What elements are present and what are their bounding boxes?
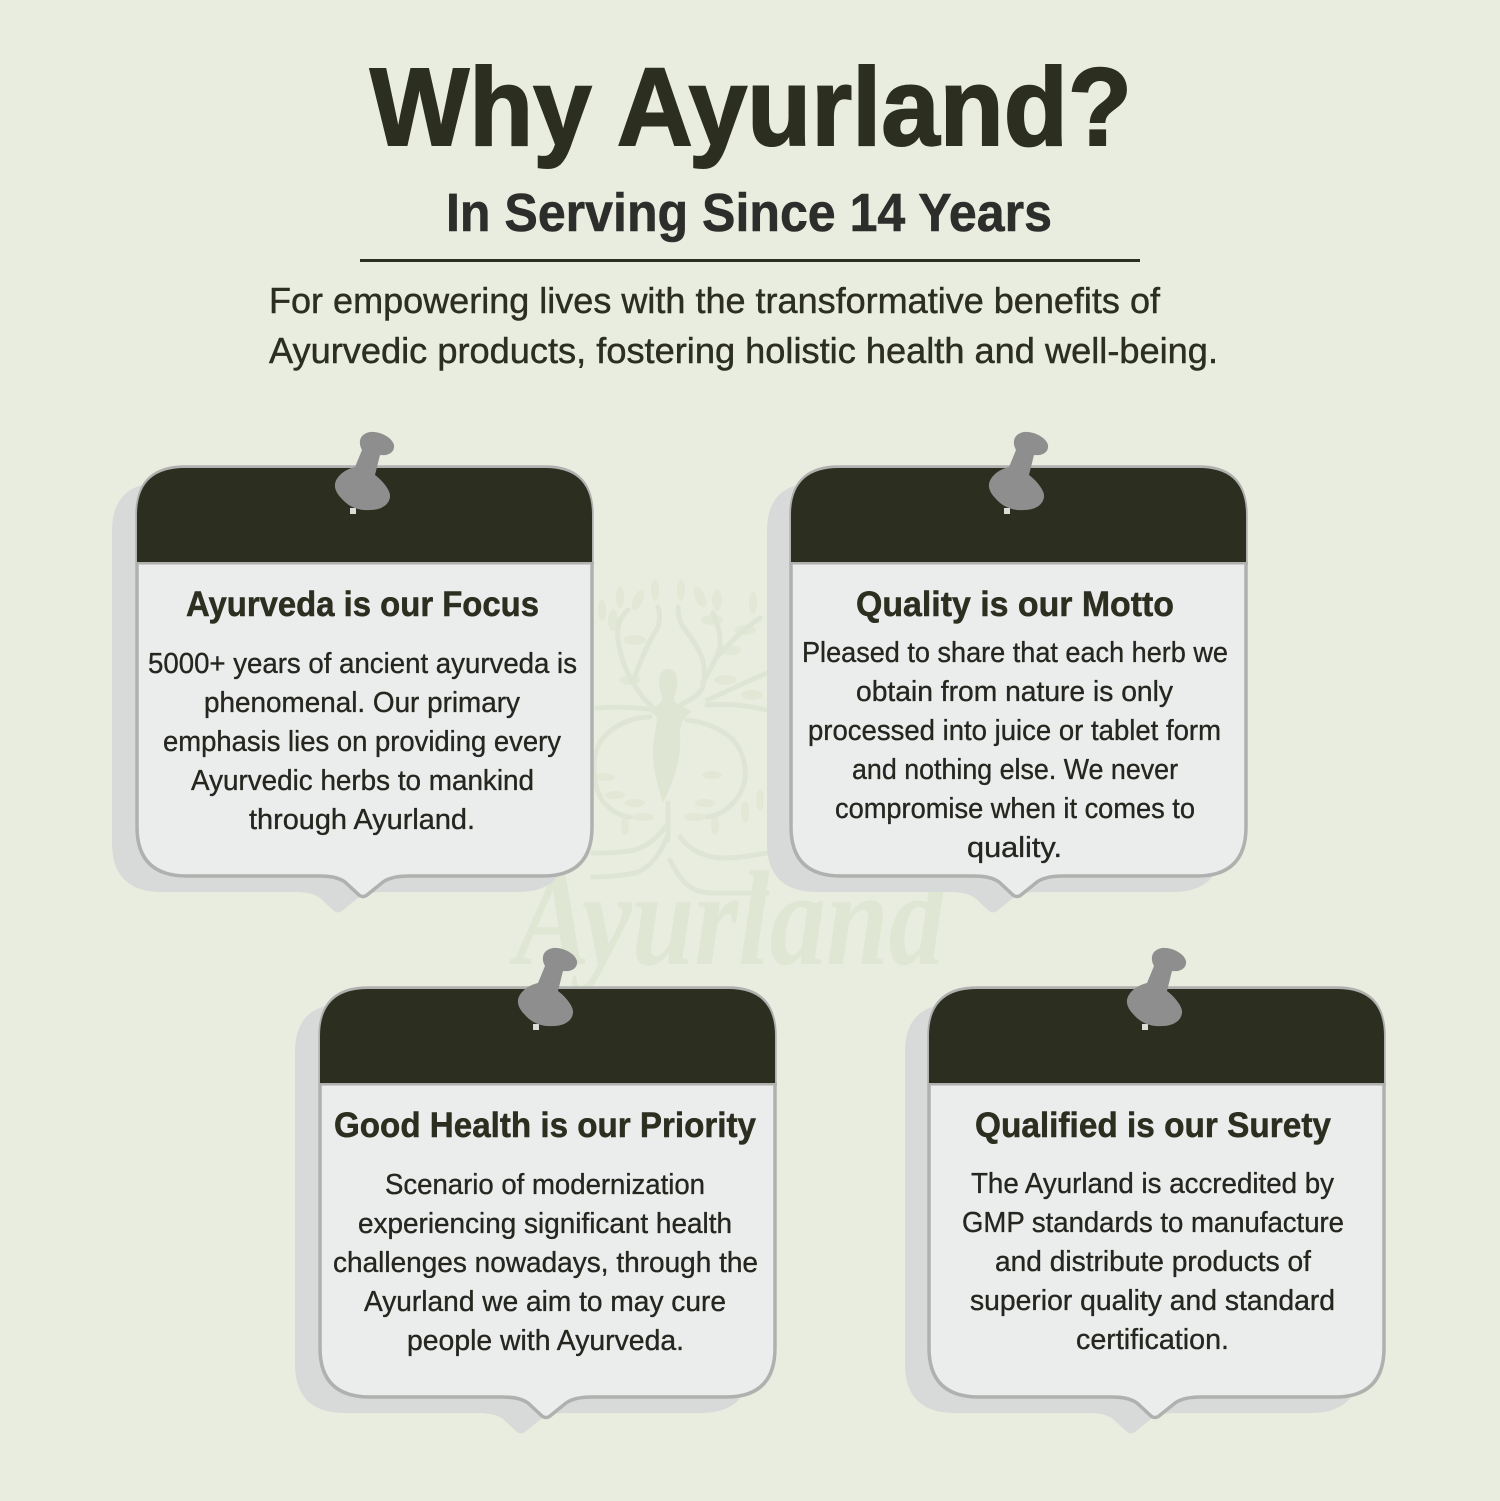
watermark leaves (595, 579, 764, 835)
panel: Qualified is our Surety (905, 948, 1386, 1434)
card text: Pleased to share that each herb we (802, 637, 1228, 669)
card text (333, 1169, 758, 1357)
card text: obtain from nature is only (856, 676, 1173, 708)
card text: challenges nowadays, through the (333, 1247, 758, 1279)
watermark wordmark: Ayurland (509, 845, 947, 994)
pushpin (989, 432, 1048, 514)
card body (320, 988, 775, 1418)
card header band (791, 468, 1246, 562)
panel: Ayurveda is our Focus (112, 432, 594, 912)
panel: Quality is our Motto (767, 432, 1248, 912)
card heading: Ayurveda is our Focus (186, 585, 539, 624)
card text: emphasis lies on providing every (163, 726, 561, 758)
card body (791, 467, 1246, 896)
card heading: Qualified is our Surety (975, 1106, 1332, 1145)
card text: experiencing significant health (358, 1208, 732, 1240)
card header band (137, 468, 592, 562)
card text: The Ayurland is accredited by (971, 1168, 1334, 1200)
intro text: For empowering lives with the transformative benefits of (269, 280, 1161, 321)
card text (148, 648, 577, 836)
header band rule (929, 1083, 1386, 1086)
header band rule (320, 1083, 777, 1086)
title divider (360, 259, 1140, 262)
card text: Scenario of modernization (385, 1169, 705, 1201)
card text: Ayurvedic herbs to mankind (191, 765, 534, 797)
card text: Ayurland we aim to may cure (364, 1286, 726, 1318)
card body (137, 467, 592, 896)
card heading: Quality is our Motto (856, 585, 1174, 624)
card shadow (295, 1004, 750, 1434)
intro text: Ayurvedic products, fostering holistic health and well-being. (269, 330, 1218, 371)
header band rule (137, 562, 594, 564)
card header band (929, 989, 1384, 1083)
card text: people with Ayurveda. (407, 1325, 684, 1357)
watermark: Ayurland tree logo (509, 579, 947, 994)
title: Why Ayurland? (370, 46, 1132, 169)
card text: superior quality and standard (970, 1285, 1335, 1317)
card heading: Good Health is our Priority (334, 1106, 757, 1145)
panel: Good Health is our Priority (295, 948, 777, 1434)
card text (802, 637, 1228, 864)
header band rule (791, 562, 1248, 564)
card text: and nothing else. We never (852, 754, 1178, 786)
pushpin (518, 948, 577, 1030)
intro text (269, 280, 1218, 371)
card text: and distribute products of (995, 1246, 1312, 1278)
card header band (320, 989, 775, 1083)
card text (962, 1168, 1344, 1356)
watermark tree branches (593, 607, 767, 893)
card shadow (905, 1004, 1360, 1434)
card text: quality. (967, 832, 1062, 864)
card text: through Ayurland. (249, 804, 475, 836)
card shadow (767, 483, 1222, 912)
card body (929, 988, 1384, 1418)
watermark figure body (649, 669, 692, 803)
card text: certification. (1076, 1324, 1229, 1356)
subtitle: In Serving Since 14 Years (446, 183, 1052, 243)
card text: processed into juice or tablet form (808, 715, 1221, 747)
card text: compromise when it comes to (835, 793, 1195, 825)
pushpin (1127, 948, 1186, 1030)
pushpin (335, 432, 394, 514)
card text: phenomenal. Our primary (204, 687, 520, 719)
card shadow (112, 483, 567, 912)
card text: GMP standards to manufacture (962, 1207, 1344, 1239)
card text: 5000+ years of ancient ayurveda is (148, 648, 577, 680)
